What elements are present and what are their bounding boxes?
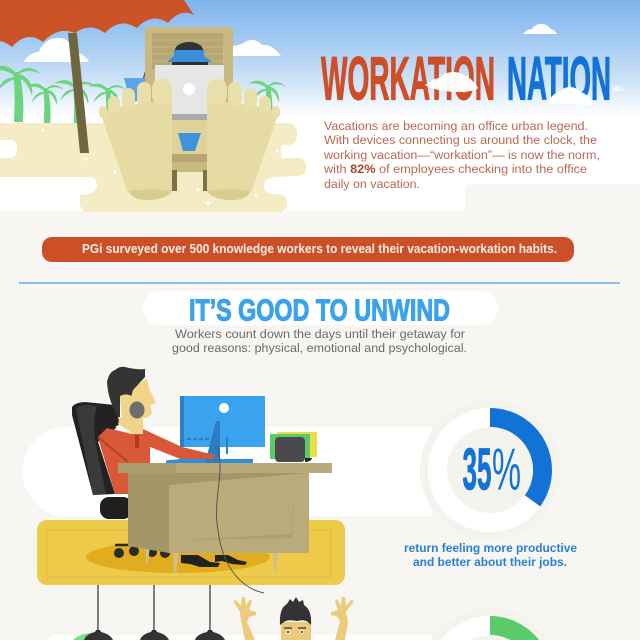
palm trees xyxy=(0,66,285,125)
torso xyxy=(98,428,215,494)
section heading: IT’S GOOD TO UNWIND xyxy=(189,294,450,328)
desk body xyxy=(168,473,309,553)
collar xyxy=(115,424,133,434)
laptop xyxy=(155,65,224,120)
desk top xyxy=(118,463,332,473)
donut chart: green, partial xyxy=(431,608,549,640)
torso and swimwear xyxy=(171,120,209,191)
yellow rug xyxy=(37,520,345,585)
wire xyxy=(216,446,264,593)
intro text: daily on vacation. xyxy=(324,177,420,191)
intro text: Vacations are becoming an office urban legend. xyxy=(324,119,588,133)
intro text: working vacation—“workation”— is now the norm, xyxy=(323,148,600,162)
hair xyxy=(107,367,145,417)
hanging lamps xyxy=(73,585,225,640)
intro text: With devices connecting us around the clock, the xyxy=(324,133,597,147)
umbrella xyxy=(0,0,194,153)
intro text xyxy=(323,119,600,191)
head with hat xyxy=(167,42,212,66)
donut caption: return feeling more productive xyxy=(404,541,577,555)
lower white band xyxy=(49,635,432,640)
clouds xyxy=(24,24,557,62)
right arm and hand xyxy=(331,597,354,640)
desk xyxy=(118,463,332,574)
donut caption xyxy=(404,541,577,569)
chair back xyxy=(145,27,233,127)
title clouds xyxy=(425,72,624,105)
section intro text: Workers count down the days until their getaway for xyxy=(175,327,465,341)
section intro text xyxy=(172,327,467,355)
hero sky xyxy=(0,0,640,211)
hand and phone xyxy=(120,394,136,418)
sand xyxy=(0,123,306,212)
donut caption: and better about their jobs. xyxy=(413,555,567,569)
office chair xyxy=(72,402,170,558)
umbrella pole xyxy=(68,33,89,153)
computer monitor xyxy=(166,396,265,463)
umbrella canopy xyxy=(0,0,194,47)
donut chart: 35% xyxy=(420,400,560,540)
cheering person xyxy=(233,597,354,640)
desk legs xyxy=(145,546,278,574)
donut chart: 35%: 35 xyxy=(462,436,492,502)
left arm and hand xyxy=(233,597,256,640)
neck xyxy=(118,417,143,434)
head xyxy=(281,622,311,640)
man on phone xyxy=(98,367,215,494)
feet xyxy=(99,79,280,200)
white band behind desk xyxy=(22,427,432,516)
section intro text: good reasons: physical, emotional and psychological. xyxy=(172,341,467,355)
files and box on desk xyxy=(270,432,317,462)
drink bucket xyxy=(124,40,155,102)
survey banner xyxy=(42,237,574,262)
shoes xyxy=(181,555,247,567)
intro text: with 82% of employees checking into the office xyxy=(323,162,587,176)
beach chair and person with laptop xyxy=(145,27,233,191)
donut chart: 35%: % xyxy=(492,436,521,502)
face xyxy=(128,378,156,418)
eyes xyxy=(284,628,306,634)
survey banner: PGi surveyed over 500 knowledge workers to reveal their vacation-workation habits. xyxy=(82,241,557,256)
